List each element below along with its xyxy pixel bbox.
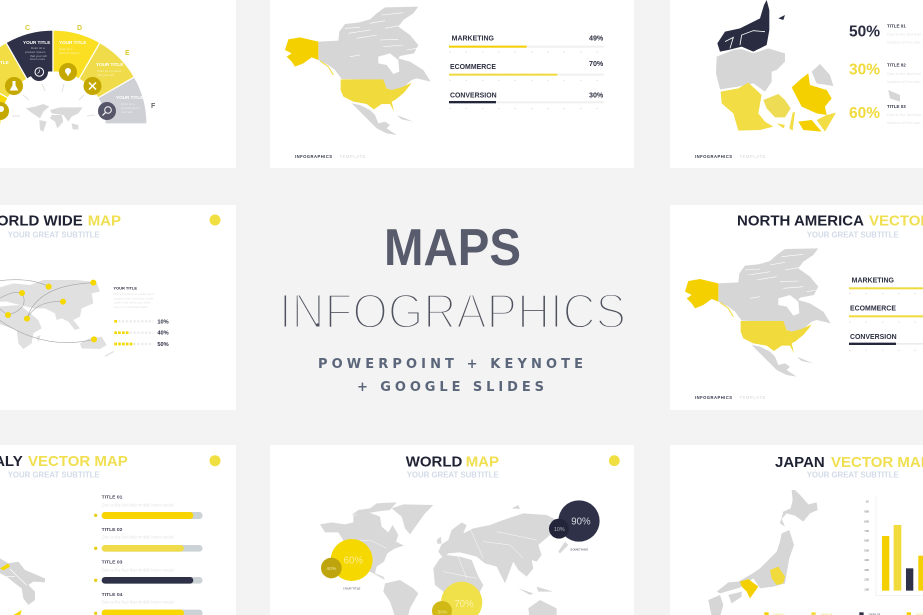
panel: world wide map [0,205,236,410]
progress rows: TITLE 01 [102,494,123,500]
stat titles: TITLE 02 [887,62,906,68]
heading: MAP [466,453,499,470]
segment letters [25,25,156,110]
panel: North America bars [270,0,634,168]
bars [849,276,923,350]
segment descriptions: Dolor sit a [31,46,45,50]
bars: ECOMMERCE [450,63,496,71]
bubbles: 60 and 40 percent: 60% [344,555,363,566]
bubbles: 90 and 10 percent [549,500,600,552]
text block: location of the user lorem social [113,296,153,300]
progress rows: Due to the fact that mobile lorem social [102,567,174,572]
footer label: INFOGRAPHICS [695,395,733,400]
panel: world map [270,445,634,615]
stat descriptions: Due to the fact that [887,112,922,117]
map: world [320,502,568,615]
bar chart: 600 [864,539,869,543]
subtitle: YOUR GREAT SUBTITLE [807,230,899,240]
subtitle: YOUR GREAT SUBTITLE [407,470,499,480]
bubbles: 90 and 10 percent: 10% [554,527,565,533]
heading: JAPAN [775,454,825,471]
title: MAPS: MAPS [384,219,521,277]
segment titles [0,40,143,100]
bars: MARKETING [452,35,494,43]
bars: CONVERSION [850,333,897,341]
text block: Due to the fact that mobile lorem [113,292,155,296]
bars [449,35,604,109]
progress rows: TITLE 04 [102,592,123,598]
percent stats: 30% [849,62,880,78]
segment descriptions: product, lipsum [25,50,46,54]
badge [609,455,620,466]
stat descriptions: location of the user [887,120,921,125]
rating rows: 10% [157,319,169,325]
panel: Denmark map [670,0,923,168]
text block: content that will be your lorem [113,301,152,305]
footer label: TEMPLATE [339,154,366,159]
footer label: TEMPLATE [739,154,766,159]
rating rows: 40% [157,331,169,337]
segment descriptions: Dolor sit a [121,102,135,106]
chart legend [764,612,923,615]
bar chart: 500 [864,548,869,552]
segment descriptions: that your will [30,54,47,58]
map: North America [685,248,831,377]
stat descriptions [887,32,922,125]
subtitle: YOUR GREAT SUBTITLE [8,230,100,240]
heading: VECTOR MAP [28,453,128,470]
segment descriptions: product, lipsum [59,51,80,55]
bubbles: 70 and 30 percent: 70% [454,599,474,610]
segment titles: YOUR TITLE [116,95,143,100]
progress rows: TITLE 02 [102,527,123,533]
segment titles: YOUR TITLE [23,40,50,45]
subtitle: software: POWERPOINT + KEYNOTE [318,357,583,372]
bar chart: 100 [864,587,869,591]
segment E [79,43,134,98]
bar chart [864,497,923,596]
segment letters: F [151,103,156,110]
segment B [0,43,27,98]
text block: more to the fact that mobile [113,305,148,309]
bars: ECOMMERCE [850,305,896,313]
heading [737,213,923,230]
bubbles: 60 and 40 percent: 40% [326,566,337,572]
heading: MAP [88,213,121,230]
map with routes [0,280,114,357]
footer label: INFOGRAPHICS [295,154,333,159]
segment descriptions: that your will [97,73,114,77]
segment letters: D [77,25,82,32]
stat titles [887,24,906,109]
bubbles: 90 and 10 percent: SOMETHING [570,548,589,552]
heading [0,213,121,230]
map: Japan [708,490,818,615]
subtitle: google slides: + GOOGLE SLIDES [357,380,544,395]
percent stats [849,24,880,122]
bar chart: 400 [864,558,869,562]
bar chart: 200 [864,578,869,582]
heading [406,453,499,470]
stat titles: TITLE 03 [887,104,906,109]
bubbles: 60 and 40 percent [321,539,373,591]
bars: CONVERSION [450,91,497,99]
title: INFOGRAPHICS: INFOGRAPHICS [279,285,626,339]
segment C [6,30,53,79]
progress rows [94,494,203,615]
segment descriptions: lorem more [30,57,46,61]
segment descriptions: Dolor sit a [59,47,73,51]
segment titles: YOUR TITLE [59,40,86,45]
badge [210,455,220,466]
bar chart: 900 [864,509,869,513]
footer label [295,154,366,159]
footer label: INFOGRAPHICS [695,154,733,159]
map: North America [285,7,431,135]
footer label [695,154,766,159]
stat titles: TITLE 01 [887,24,906,28]
subtitle: YOUR GREAT SUBTITLE [8,470,100,480]
panel: Japan vector map [670,445,923,615]
bars: MARKETING [852,276,894,284]
bubbles: 70 and 30 percent [432,582,482,615]
bar chart: 1K [866,500,869,504]
text block: YOUR TITLE [113,285,137,290]
map: Italy [0,558,45,615]
segment A [0,77,8,124]
progress rows: Due to the fact that mobile lorem social [102,502,174,507]
bubbles: 90 and 10 percent: 90% [571,516,591,527]
bars: 49% [589,35,604,43]
bubbles: 60 and 40 percent: YOUR TITLE [343,587,360,591]
heading: WORLD [406,453,463,470]
rating rows [114,319,169,348]
bars: 30% [589,91,604,99]
map: Denmark [716,0,900,132]
arrows to map [12,84,95,116]
rating rows: 50% [157,342,169,348]
segment letters: C [25,25,30,32]
text block [113,285,155,309]
progress rows: TITLE 03 [102,559,123,565]
stat descriptions: location of the user [887,40,921,44]
stat descriptions: location of the user [887,79,921,84]
heading: NORTH AMERICA [737,213,864,230]
icon circles [0,63,116,120]
footer label [695,395,766,400]
segment descriptions: your will [121,110,132,114]
bar chart: 700 [864,529,869,533]
segment titles: TLE [0,60,9,65]
stat descriptions: Due to the fact that [887,71,922,76]
subtitle: YOUR GREAT SUBTITLE [807,470,899,480]
stat descriptions: Due to the fact that [887,32,922,36]
percent stats: 60% [849,105,880,122]
bar chart: 800 [864,519,869,523]
bar chart: 300 [864,568,869,572]
segment descriptions: Dolor sit a product [97,69,122,73]
panel: North America vector map [670,205,923,410]
progress rows: Due to the fact that mobile lorem social [102,535,174,540]
segment D [53,30,100,79]
title block [279,219,626,395]
panel: Italy vector map [0,445,236,615]
segment letters: E [125,50,130,57]
footer label: TEMPLATE [739,395,766,400]
segment titles: YOUR TITLE [96,62,123,67]
badge [210,214,220,226]
segment descriptions [25,46,141,114]
progress rows: Due to the fact that mobile lorem social [102,600,174,605]
small world map [26,104,83,132]
percent stats: 50% [849,24,880,40]
segment F [98,77,147,124]
heading [775,454,923,471]
panel: semicircle infographic [0,0,236,168]
bars: 70% [589,60,604,68]
segment descriptions: product lipsum [121,106,141,110]
